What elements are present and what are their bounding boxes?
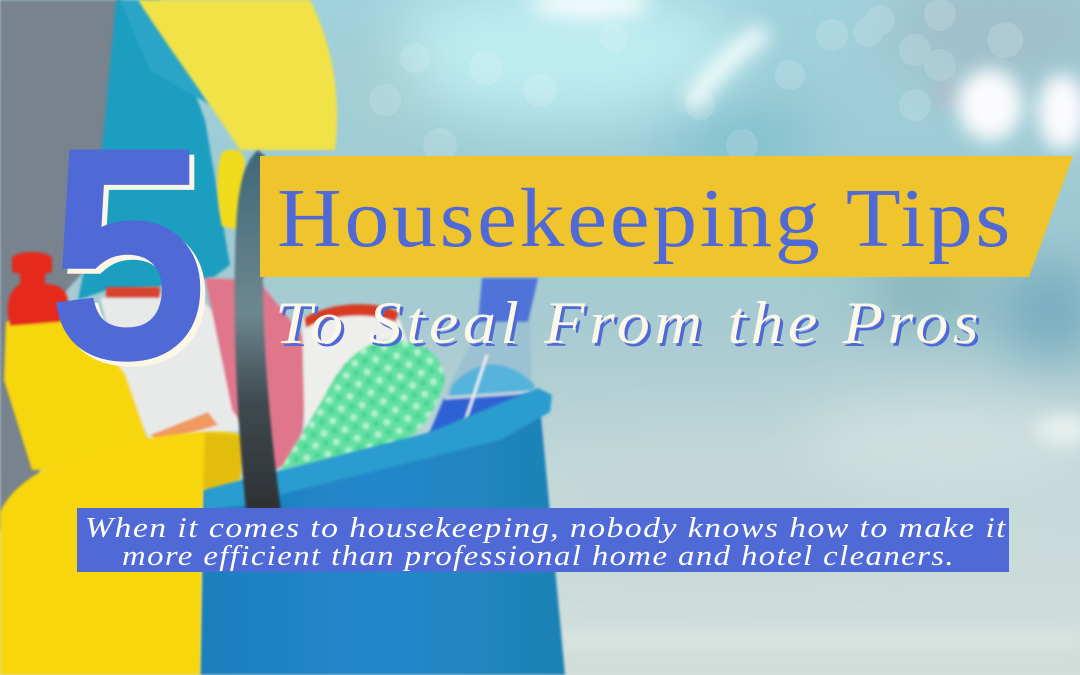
intro text [85, 513, 1007, 572]
photo: person's grey shirt [0, 0, 122, 530]
photo: yellow cloth [0, 432, 245, 675]
big number 5: 5 [53, 96, 205, 413]
photo: green scrub brush [280, 340, 444, 470]
photo: white bottle [100, 292, 243, 440]
photo: white jug with red lid [302, 306, 410, 440]
big number 5: 5 [58, 101, 210, 418]
photo: bucket handle [235, 150, 281, 510]
intro text: more efficient than professional home and hotel cleaners. [122, 541, 955, 572]
photo: red bottle cap [8, 252, 68, 326]
photo: pink sponge [205, 278, 310, 470]
title banner [260, 156, 1073, 277]
intro text box [77, 508, 1009, 572]
intro text: When it comes to housekeeping, nobody knows how to make it [85, 513, 1007, 544]
photo: orange sponge [150, 412, 218, 442]
photo: bucket rim [205, 388, 552, 510]
photo: yellow bottle [4, 307, 150, 470]
photo: spray bottle [430, 320, 532, 436]
photo: teal apron [78, 0, 230, 300]
photo: cleaning bottles and supplies [4, 252, 538, 470]
subtitle: To Steal From the Pros: To Steal From the Pros [275, 290, 983, 356]
title: Housekeeping Tips: Housekeeping Tips [277, 172, 1013, 265]
subtitle: To Steal From the Pros: To Steal From the Pros [278, 293, 986, 359]
photo: bucket body [200, 388, 565, 675]
photo: yellow rubber glove [138, 0, 337, 230]
